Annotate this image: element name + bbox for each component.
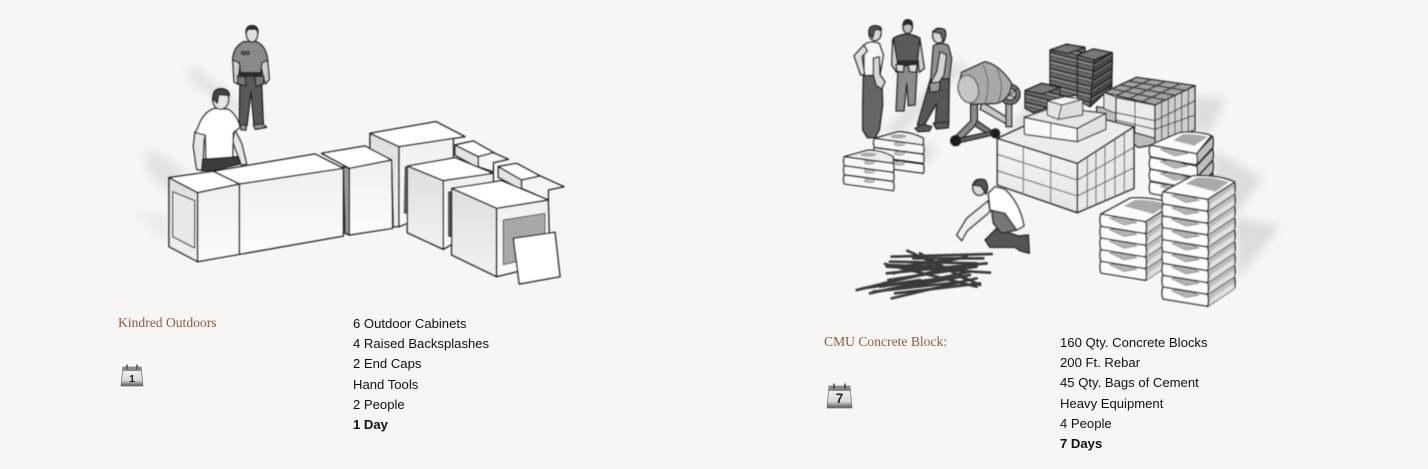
spec list: Kindred Outdoors: 4 Raised Backsplashes [353, 336, 489, 351]
cabinet: open front unit with door panel [452, 181, 560, 284]
cabinet: back tall unit [370, 122, 465, 227]
installer: man in white shirt [193, 89, 247, 171]
icon: calendar showing 1: 1 [129, 373, 135, 385]
installer: standing man [233, 26, 269, 130]
small cement bag stacks [843, 132, 924, 191]
spec list: Kindred Outdoors: Hand Tools [353, 377, 418, 392]
worker: left, hands on hip [854, 26, 885, 138]
spec list: CMU Concrete Block: 200 Ft. Rebar [1060, 355, 1140, 370]
front cement bag stacks [1100, 175, 1235, 306]
illustration: Kindred Outdoors cabinets and installers [137, 26, 564, 284]
cabinet: small front unit [322, 146, 393, 235]
stacked dark block pallets [1025, 44, 1112, 113]
cement mixer [951, 62, 1020, 146]
spec list: Kindred Outdoors: 1 Day [353, 417, 388, 432]
spec list: Kindred Outdoors [353, 316, 489, 432]
spec list: CMU Concrete Block: 160 Qty. Concrete Blocks [1060, 335, 1208, 350]
rebar pile [857, 251, 992, 298]
spec list: Kindred Outdoors: 6 Outdoor Cabinets [353, 316, 467, 331]
spec list: CMU Concrete Block: 7 Days [1060, 436, 1102, 451]
worker: middle, facing forward [892, 20, 924, 111]
cabinet: long front unit [213, 154, 343, 254]
cast shadows [882, 60, 1280, 280]
illustration: CMU block materials and crew [843, 20, 1280, 306]
backsplash: rear pair [455, 141, 508, 172]
worker: right, in profile [915, 28, 952, 132]
kneeling worker [957, 179, 1029, 253]
backsplash: front pair [498, 163, 564, 200]
cast shadows [137, 67, 240, 243]
icon: calendar showing 1 [121, 364, 143, 386]
spec list: Kindred Outdoors: 2 End Caps [353, 356, 421, 371]
cabinet: right column, middle unit [407, 158, 493, 249]
icon: calendar showing 7: 7 [836, 391, 843, 406]
spec list: CMU Concrete Block: 45 Qty. Bags of Cement [1060, 375, 1199, 390]
spec list: CMU Concrete Block: Heavy Equipment [1060, 396, 1163, 411]
back cement bag stack [1149, 132, 1213, 202]
spec list: Kindred Outdoors: 2 People [353, 397, 405, 412]
icon: calendar showing 7 [827, 384, 852, 408]
label: Kindred Outdoors: Kindred Outdoors [118, 315, 217, 330]
cabinet: left end unit [169, 171, 239, 262]
back block pallet [1097, 77, 1195, 147]
main block pallet [997, 97, 1134, 213]
spec list: CMU Concrete Block [1060, 335, 1208, 451]
spec list: CMU Concrete Block: 4 People [1060, 416, 1112, 431]
label: CMU Concrete Block: CMU Concrete Block: [824, 334, 947, 349]
